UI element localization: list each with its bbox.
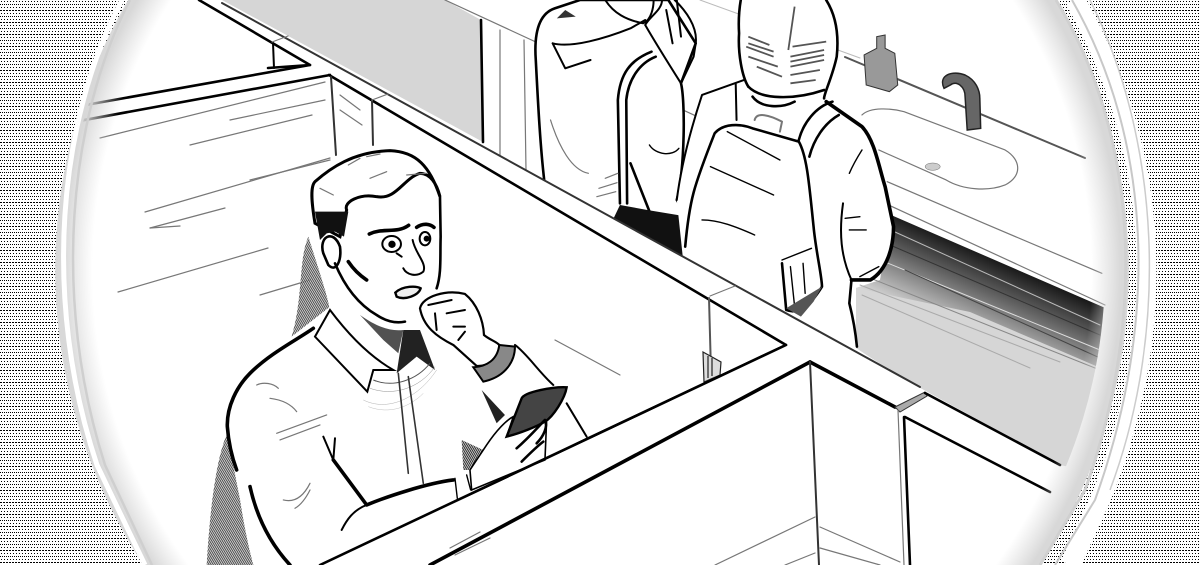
lower faint lines	[450, 517, 900, 565]
gray back wall	[222, 0, 483, 142]
cheek mark	[348, 262, 367, 280]
lower leg edge	[849, 280, 857, 347]
sleeve detail	[649, 145, 679, 154]
dark fold at arm	[482, 390, 505, 423]
man	[207, 151, 588, 565]
collar right dark	[397, 330, 435, 373]
person with backpack	[677, 0, 894, 353]
sleeve folds	[257, 383, 327, 508]
right arm edge	[515, 345, 587, 437]
panel top edges	[320, 345, 786, 565]
hair strokes	[320, 154, 427, 195]
backpack seams	[702, 132, 811, 307]
left eye	[382, 236, 401, 252]
head and neck	[320, 190, 441, 322]
placket	[398, 373, 423, 483]
strip upper edge covering man	[330, 345, 900, 565]
seam	[895, 392, 927, 412]
hatched shadow behind shoulder	[207, 433, 257, 565]
hatching	[551, 120, 618, 197]
faucet	[943, 73, 981, 130]
phone	[507, 387, 567, 437]
upper wall line	[222, 3, 920, 387]
dark floor hatching	[856, 215, 1110, 372]
back wall lines	[445, 0, 1105, 305]
backpack handle	[755, 115, 782, 132]
hair	[312, 151, 440, 237]
gray floor	[856, 215, 1110, 475]
torso shirt	[229, 263, 588, 565]
shirt pocket shadow	[462, 440, 483, 470]
raised hand	[645, 0, 696, 83]
backpack strap	[618, 52, 656, 217]
fingers	[428, 300, 465, 340]
phone hand	[470, 417, 547, 490]
mouth	[395, 287, 421, 298]
jacket body	[676, 14, 892, 278]
cubicle wall pen strokes	[100, 82, 620, 375]
hatched shadow behind neck	[292, 237, 330, 337]
shirt collar	[315, 310, 393, 392]
counter edge	[887, 182, 1102, 273]
wall strip and cubicle panels	[542, 180, 982, 422]
right brow	[417, 224, 434, 227]
front cubicle panel	[320, 345, 1060, 565]
left shoulder	[677, 80, 744, 200]
sink basin	[862, 109, 1018, 189]
ear	[322, 236, 340, 268]
right eye	[420, 232, 430, 245]
cuff	[473, 345, 515, 382]
jaw	[335, 197, 441, 322]
hoodie back	[534, 0, 697, 218]
shoulder outline	[227, 328, 313, 470]
left arm edge	[250, 487, 290, 565]
backpack bottom shade	[786, 287, 822, 317]
backpack	[685, 125, 822, 311]
sink drain	[925, 163, 940, 170]
panel verticals	[810, 362, 819, 565]
counter and sink	[862, 35, 1102, 273]
partition top lines	[68, 0, 786, 565]
right panel lines	[905, 393, 1060, 492]
floor hatch strokes	[860, 232, 1100, 370]
person in hoodie	[535, 0, 696, 257]
nose	[397, 240, 424, 275]
hood opening dark	[557, 10, 576, 18]
inner sleeve edge	[841, 203, 851, 280]
collar	[748, 87, 824, 106]
left brow	[369, 225, 409, 234]
sleeve folds	[845, 150, 879, 277]
right shoulder and sleeve	[826, 102, 894, 280]
right strap	[799, 102, 839, 157]
arm fold	[333, 460, 453, 505]
chest shading arcs	[363, 363, 437, 410]
hood wrinkles	[746, 7, 826, 83]
arm back fold	[323, 437, 367, 530]
panel back fill	[415, 378, 818, 565]
hood outline	[739, 0, 837, 98]
hinge	[703, 352, 721, 382]
soap dispenser	[864, 35, 898, 92]
phone fingers	[517, 420, 546, 462]
dark trousers	[614, 205, 687, 257]
hood folds	[553, 20, 645, 68]
floor region	[856, 215, 1110, 475]
face	[605, 0, 654, 23]
dark side hair	[315, 212, 348, 240]
neck shading	[360, 315, 403, 353]
watch band	[455, 475, 471, 498]
fist at chin	[420, 292, 499, 366]
